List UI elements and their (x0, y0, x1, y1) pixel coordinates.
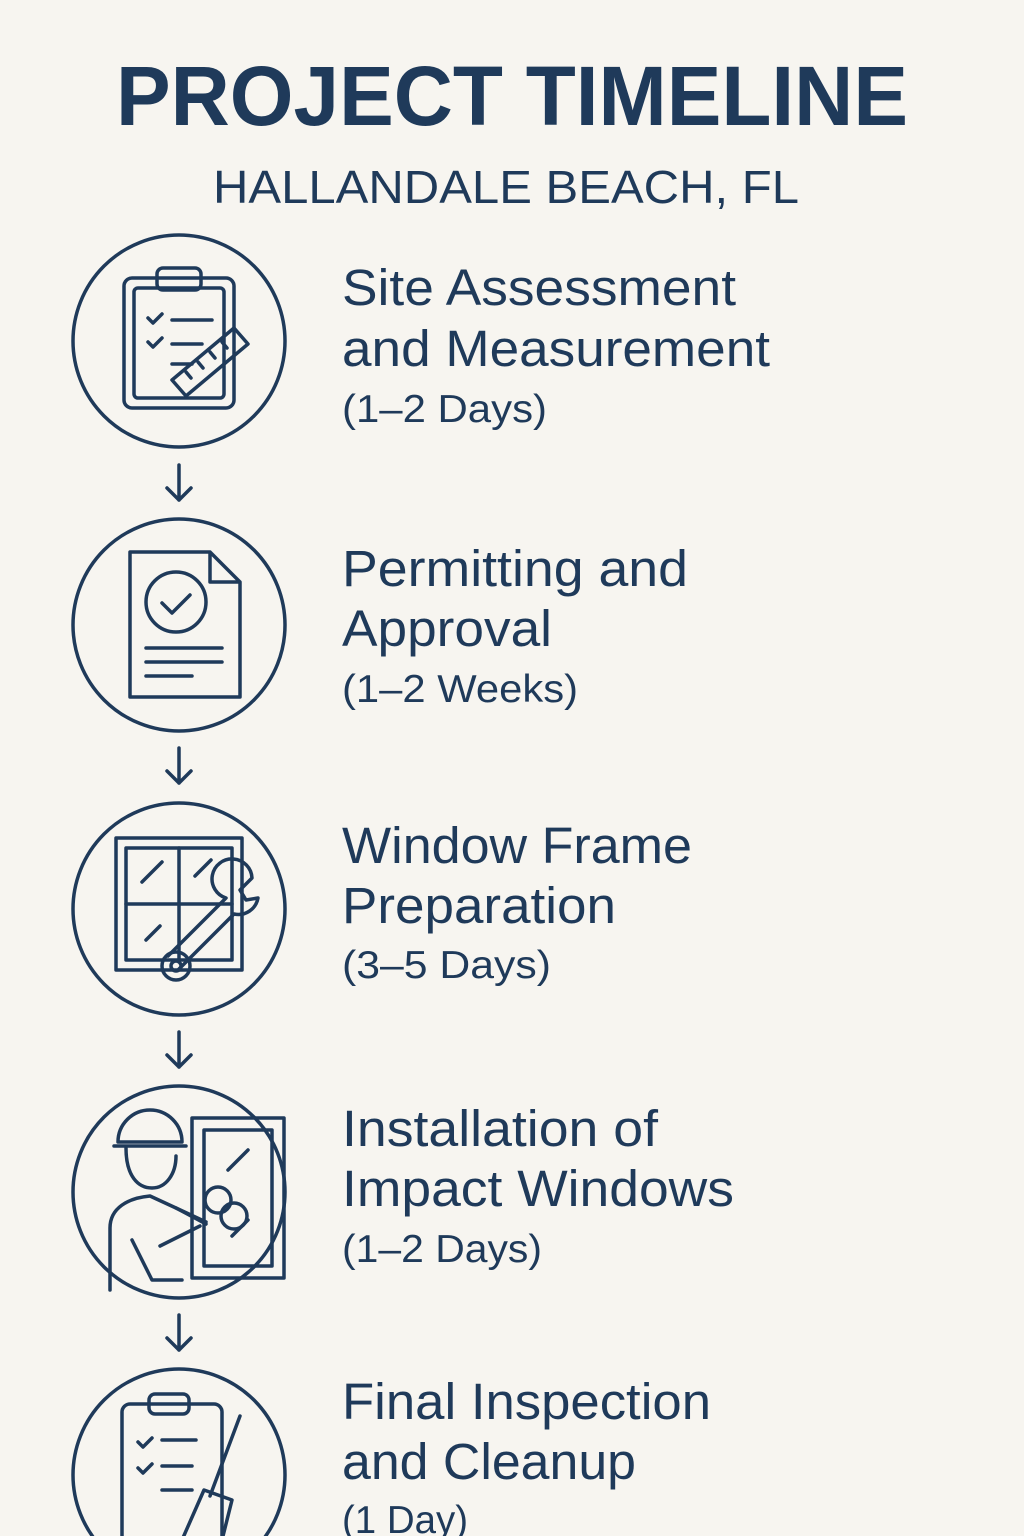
step 2 text: (1–2 Weeks) (342, 668, 578, 711)
arrow 3 (167, 1032, 191, 1067)
title: PROJECT TIMELINE (116, 49, 908, 143)
icon: document with check (73, 519, 285, 731)
step 1 text: (1–2 Days) (342, 388, 547, 431)
subtitle: HALLANDALE BEACH, FL (213, 161, 799, 213)
step 5 text (342, 1373, 711, 1536)
step 1 text: and Measurement (342, 320, 770, 377)
step 3 text (342, 817, 692, 987)
step 4 text: Installation of (342, 1100, 659, 1157)
step 1 text (342, 259, 770, 431)
icon: clipboard with broom (73, 1369, 285, 1536)
icon: clipboard with ruler (73, 235, 285, 447)
arrow 1 (167, 465, 191, 500)
step 2 text (342, 540, 688, 711)
step 4 text (342, 1100, 734, 1271)
step 5 text: Final Inspection (342, 1373, 711, 1430)
step 3 text: Window Frame (342, 817, 692, 874)
step 2 text: Permitting and (342, 540, 688, 597)
step 4 text: Impact Windows (342, 1160, 734, 1217)
step 3 text: (3–5 Days) (342, 944, 551, 987)
step 3 text: Preparation (342, 877, 616, 934)
step 5 text: and Cleanup (342, 1433, 636, 1490)
arrow 4 (167, 1315, 191, 1350)
arrow 2 (167, 748, 191, 783)
step 4 text: (1–2 Days) (342, 1228, 542, 1271)
step 1 text: Site Assessment (342, 259, 736, 316)
step 2 text: Approval (342, 600, 552, 657)
icon: worker installing window (73, 1086, 285, 1298)
icon: window with wrench (73, 803, 285, 1015)
